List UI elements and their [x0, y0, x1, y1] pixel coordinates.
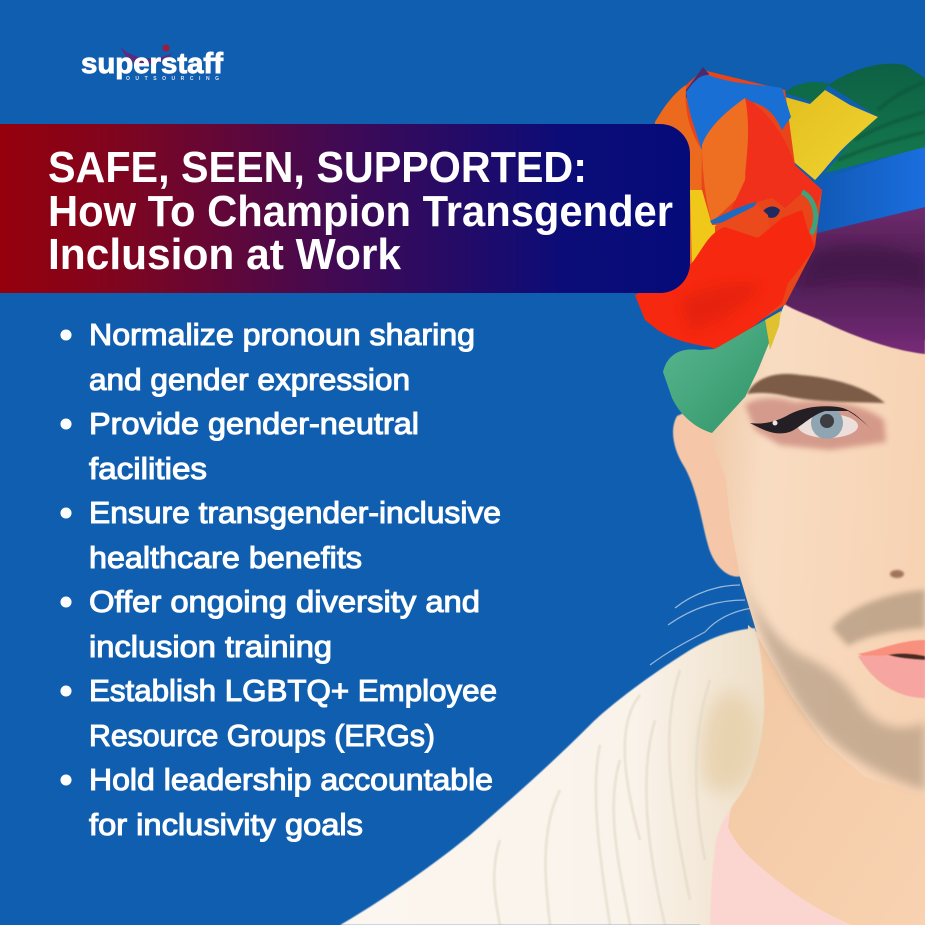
- ear: [673, 408, 742, 577]
- nostril: [890, 570, 904, 578]
- face: [708, 303, 925, 797]
- lips: [858, 640, 925, 698]
- bullet item 3: healthcare benefits: [89, 540, 362, 575]
- title line 2: How To Champion Transgender: [48, 187, 673, 236]
- bullet item 6: Hold leadership accountable: [89, 762, 493, 797]
- title banner: [0, 124, 690, 293]
- bullet item 1: [61, 317, 475, 397]
- bullet item 3: [61, 495, 501, 575]
- bullet item 6: [61, 762, 493, 842]
- knot: red lower: [635, 210, 815, 348]
- bullet item 4: Offer ongoing diversity and: [89, 584, 480, 619]
- knot: blue slit: [710, 202, 757, 224]
- moustache shadow: [832, 590, 925, 646]
- bullet item 5: Establish LGBTQ+ Employee: [89, 673, 497, 708]
- title line 3: Inclusion at Work: [48, 230, 402, 279]
- bullet item 1: Normalize pronoun sharing: [89, 317, 475, 352]
- logo: [81, 44, 223, 82]
- stubble shadow: [738, 555, 925, 790]
- knot: green ring: [802, 192, 816, 234]
- knot: red middle: [715, 205, 770, 262]
- bullet item 6: for inclusivity goals: [89, 807, 363, 842]
- title line 1: SAFE, SEEN, SUPPORTED:: [48, 143, 587, 192]
- fur collar: [340, 628, 764, 925]
- neck: [728, 625, 925, 925]
- fur wisps: [650, 585, 752, 665]
- bullet item 2: facilities: [89, 451, 207, 486]
- green fold lines: [838, 82, 925, 160]
- knot: dark hole: [762, 206, 780, 218]
- head wrap: green folds: [825, 64, 925, 173]
- banner background: [0, 124, 690, 293]
- knot: blue top: [686, 75, 791, 150]
- knot: yellow strip: [765, 311, 781, 350]
- knot: orange left: [650, 85, 702, 300]
- bullet item 4: inclusion training: [89, 629, 332, 664]
- eyeshadow: [745, 398, 886, 450]
- head wrap: yellow fold: [782, 90, 878, 180]
- purple fold: [800, 244, 925, 290]
- knot: red upper: [730, 98, 822, 212]
- photo: person with rainbow head wrap: [340, 64, 925, 925]
- knot: orange centre: [702, 98, 757, 222]
- bullet list: [61, 317, 501, 842]
- knot base: [635, 70, 822, 349]
- head wrap: blue band: [812, 147, 925, 234]
- bullet item 5: [61, 673, 497, 753]
- bullet item 2: [61, 406, 419, 486]
- pink shirt: [700, 775, 860, 925]
- logo wordmark: superstaff: [81, 48, 223, 80]
- knot: green lower: [663, 320, 769, 433]
- head wrap: purple band: [783, 207, 925, 354]
- bullet item 1: and gender expression: [89, 362, 410, 397]
- knot: yellow centre: [690, 190, 735, 262]
- eyebrow: [747, 374, 885, 403]
- bullet item 5: Resource Groups (ERGs): [89, 718, 435, 753]
- logo subline: OUTSOURCING: [126, 76, 219, 82]
- head wrap: dark green fold: [785, 82, 830, 102]
- bullet item 2: Provide gender-neutral: [89, 406, 419, 441]
- knot: purple tip: [686, 67, 709, 98]
- eye: [750, 406, 876, 439]
- bullet item 3: Ensure transgender-inclusive: [89, 495, 501, 530]
- bullet item 4: [61, 584, 480, 664]
- red shadow: [680, 284, 760, 330]
- logo swoosh: [120, 47, 172, 64]
- logo dot: [162, 44, 170, 52]
